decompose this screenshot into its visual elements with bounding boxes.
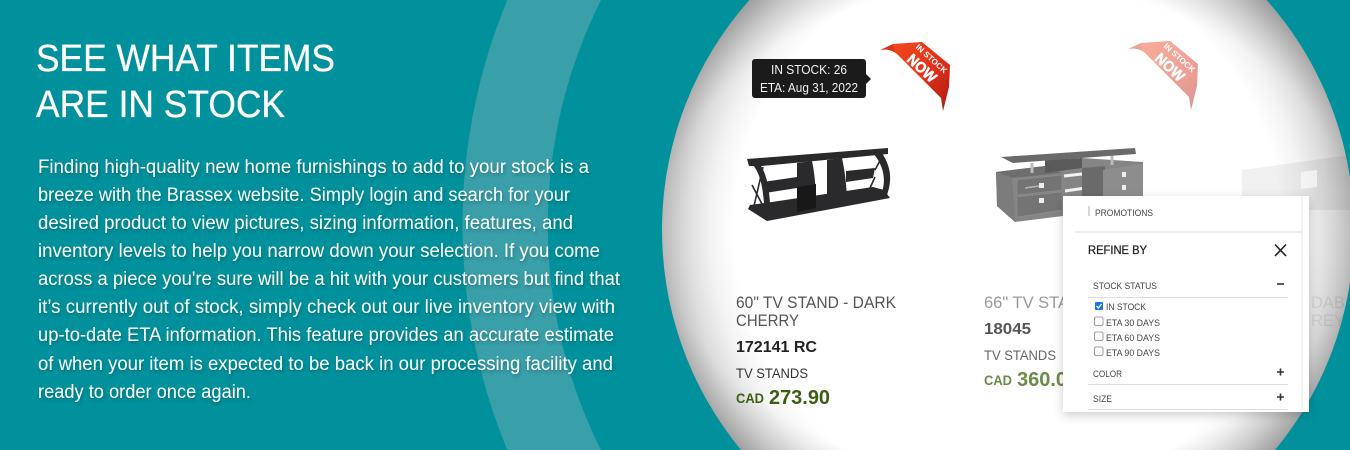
color section: COLOR (1093, 369, 1122, 380)
promotions label: PROMOTIONS (1095, 208, 1153, 218)
title (36, 38, 335, 126)
product details: 66 inch tv stand: 18045 (984, 321, 1031, 338)
product details: faded third item: REY (1311, 312, 1345, 330)
body text: up-to-date ETA information. This feature provides an accurate estimate (38, 325, 614, 346)
body text: of when your item is expected to be back in our processing facility and (38, 354, 613, 375)
stock tooltip (752, 59, 871, 98)
refine by filter panel: ETA 90 DAYS (1106, 348, 1160, 359)
body text: inventory levels to help you narrow down your selection. If you come (38, 241, 600, 262)
checkbox: eta 30 days (1094, 317, 1103, 326)
body text: across a piece you're sure will be a hit with your customers but find that (38, 269, 621, 290)
product details: 66 inch tv stand: CAD (984, 372, 1012, 388)
product details: 60 inch tv stand: CHERRY (736, 312, 799, 330)
checkbox: eta 60 days (1094, 332, 1103, 340)
body text: desired product to view pictures, sizing information, features, and (38, 213, 573, 234)
product details: 66 inch tv stand: 66" TV STAND (984, 294, 1093, 312)
in stock ribbon, product 1 (880, 42, 950, 111)
in stock ribbon, product 2 (faded): IN STOCK (1162, 42, 1197, 74)
stock tooltip: IN STOCK: 26 (771, 62, 847, 77)
in stock ribbon, product 1: IN STOCK (914, 43, 949, 75)
product details: 60 inch tv stand (736, 294, 896, 409)
refine by filter panel: ETA 60 DAYS (1106, 333, 1160, 344)
product details: 60 inch tv stand: TV STANDS (736, 366, 808, 381)
body text: breeze with the Brassex website. Simply login and search for your (38, 185, 571, 206)
in stock ribbon, product 2 (faded): NOW (1151, 50, 1188, 86)
checkbox: eta 90 days (1094, 347, 1103, 356)
decorative light ring (463, 0, 601, 450)
product image: dark tv stand (747, 148, 890, 221)
product image: grey media console (996, 148, 1143, 222)
title: ARE IN STOCK (36, 84, 285, 126)
size section: SIZE (1093, 394, 1112, 405)
product details: 66 inch tv stand: 360.00 (1017, 369, 1078, 391)
refine by filter panel (1063, 196, 1309, 412)
product details: faded third item (1311, 294, 1345, 330)
in stock ribbon, product 1: NOW (903, 51, 940, 87)
product details: 60 inch tv stand: 60" TV STAND - DARK (736, 294, 896, 312)
title: SEE WHAT ITEMS (36, 38, 335, 80)
spotlight circle (662, 0, 1350, 450)
refine by filter panel: IN STOCK (1106, 302, 1147, 313)
product details: 66 inch tv stand: TV STANDS (984, 348, 1056, 363)
product image: faded third item (1242, 156, 1350, 210)
product details: faded third item: DAB (1311, 294, 1345, 312)
stock tooltip: ETA: Aug 31, 2022 (760, 80, 858, 95)
product details: 60 inch tv stand: 273.90 (769, 387, 830, 409)
body text: ready to order once again. (38, 382, 251, 403)
checkbox: in stock (1095, 302, 1103, 310)
icon: close (1275, 244, 1286, 256)
body text (38, 157, 621, 403)
stock status section: STOCK STATUS (1093, 281, 1157, 292)
refine by filter panel: ETA 30 DAYS (1106, 318, 1160, 329)
body text: Finding high-quality new home furnishings to add to your stock is a (38, 157, 589, 178)
product details: 60 inch tv stand: 172141 RC (736, 339, 817, 356)
product details: 60 inch tv stand: CAD (736, 390, 764, 406)
body text: it’s currently out of stock, simply check out our live inventory view with (38, 297, 615, 318)
in stock ribbon, product 2 (faded) (1128, 41, 1198, 110)
refine by heading: REFINE BY (1088, 245, 1147, 257)
product details: 66 inch tv stand (984, 294, 1093, 391)
